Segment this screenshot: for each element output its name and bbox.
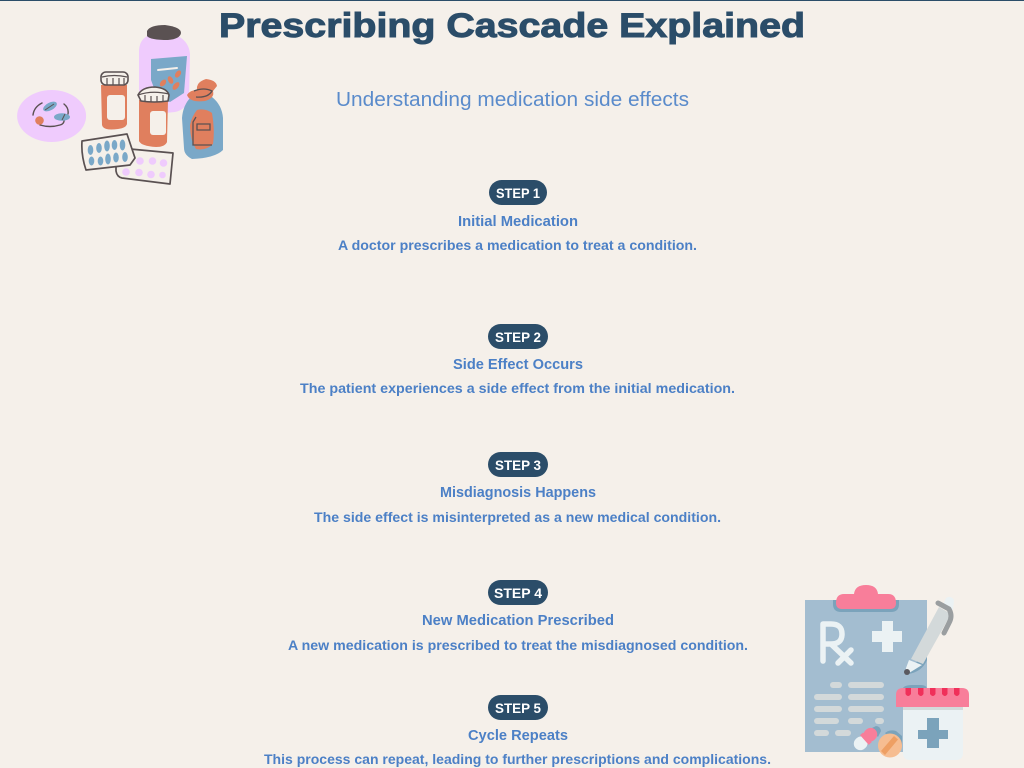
icon: blue bottle — [182, 79, 223, 159]
step 2 badge: STEP 2 — [495, 329, 541, 345]
subtitle: Understanding medication side effects — [336, 89, 689, 111]
step 4 badge — [488, 580, 548, 605]
step 1 heading: Initial Medication — [458, 214, 578, 230]
step 5 badge: STEP 5 — [495, 700, 541, 716]
step 2 badge — [488, 324, 548, 349]
icon: purple blister pack — [116, 149, 173, 184]
step 3 heading: Misdiagnosis Happens — [440, 485, 596, 501]
step 3 — [314, 452, 721, 525]
step 1 — [338, 180, 697, 253]
Rx symbol — [823, 624, 851, 663]
step 1 badge: STEP 1 — [496, 185, 540, 201]
icon: pen — [904, 597, 954, 675]
step 2 heading: Side Effect Occurs — [453, 357, 583, 373]
step 5 description: This process can repeat, leading to further prescriptions and complications. — [264, 751, 771, 767]
step 2 — [300, 324, 735, 396]
icon: orange bottle right — [138, 87, 169, 147]
illustration: medication bottles and pills — [17, 25, 223, 184]
step 3 badge: STEP 3 — [495, 457, 541, 473]
step 3 description: The side effect is misinterpreted as a new medical condition. — [314, 509, 721, 525]
step 3 badge — [488, 452, 548, 477]
step 4 — [288, 580, 748, 653]
step 5 badge — [488, 695, 548, 720]
step 4 heading: New Medication Prescribed — [422, 613, 614, 629]
step 5 — [264, 695, 771, 767]
step 2 description: The patient experiences a side effect from the initial medication. — [300, 380, 735, 396]
icon: pill plate — [17, 90, 86, 142]
step 5 heading: Cycle Repeats — [468, 728, 568, 744]
icon: capsule — [851, 725, 881, 753]
icon: jar with cross — [896, 685, 969, 760]
icon: clipboard — [805, 585, 927, 752]
title: Prescribing Cascade Explained — [219, 7, 805, 45]
step 4 badge: STEP 4 — [494, 585, 542, 601]
step 1 description: A doctor prescribes a medication to treat a condition. — [338, 237, 697, 253]
icon: orange bottle left — [101, 72, 128, 130]
icon: blue blister pack — [82, 134, 135, 170]
illustration: prescription clipboard, pen and jar — [805, 585, 969, 760]
step 4 description: A new medication is prescribed to treat the misdiagnosed condition. — [288, 637, 748, 653]
icon: large purple jar — [139, 25, 190, 113]
step 1 badge — [489, 180, 547, 205]
icon: orange tablet — [878, 730, 902, 758]
